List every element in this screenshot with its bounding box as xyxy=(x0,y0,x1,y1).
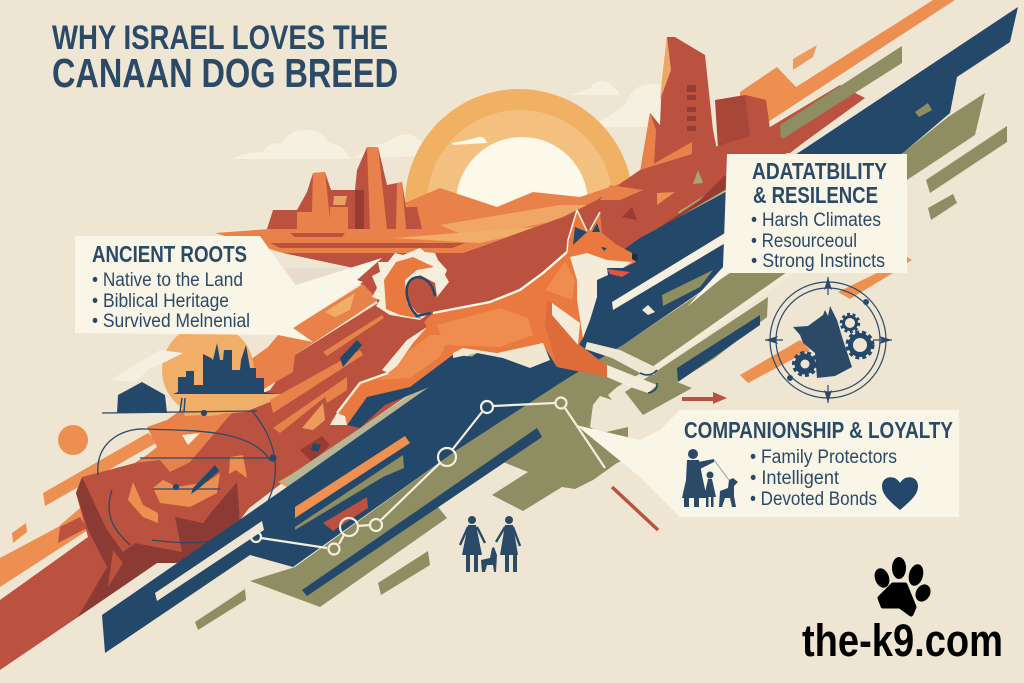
olive stripe top xyxy=(780,46,902,140)
orange stripes near gear icon xyxy=(740,257,912,383)
dog head xyxy=(567,210,638,268)
panel heading: ancient roots: ANCIENT ROOTS xyxy=(92,241,247,267)
dog belly xyxy=(453,343,550,368)
dog xyxy=(330,210,657,428)
dog paw toe lines xyxy=(640,370,657,393)
far foreleg xyxy=(585,342,657,375)
desert mountains and ground xyxy=(215,183,622,253)
panel: companionship and loyalty xyxy=(576,410,959,517)
main red diagonal band xyxy=(0,133,803,670)
dog hind tuft xyxy=(382,327,427,373)
bullet list: ancient roots: • Native to the Land xyxy=(92,270,243,291)
bullet list: companionship: • Intelligent xyxy=(750,468,840,489)
dark slash xyxy=(340,340,362,367)
navy bars on olive xyxy=(302,315,760,596)
olive bands xyxy=(195,93,1007,630)
light sun patch on field xyxy=(325,293,355,317)
icon: dog head with gears in compass xyxy=(765,277,892,403)
dog ears and face xyxy=(567,210,638,277)
red strip detail xyxy=(58,517,87,543)
icon: person, child and dog xyxy=(682,449,738,507)
left orange streaks and circle xyxy=(0,425,158,587)
panel heading: adaptability: & RESILENCE xyxy=(753,182,878,208)
bullet list: ancient roots: • Biblical Heritage xyxy=(92,291,229,312)
pale wedges near skyline xyxy=(110,350,183,382)
thin compass arcs over canyon xyxy=(98,411,276,545)
panel: ancient roots xyxy=(75,236,382,342)
dog body xyxy=(330,252,607,425)
panel heading: adaptability xyxy=(752,158,887,208)
panel heading: adaptability: ADATATBILITY xyxy=(752,158,887,184)
red canyon blob xyxy=(76,430,330,617)
dog tail xyxy=(372,248,449,320)
title: CANAAN DOG BREED xyxy=(52,50,398,96)
sun with rings xyxy=(405,89,633,317)
desert orange patches on right slope xyxy=(600,170,735,240)
panel: adaptability and resilence xyxy=(687,154,907,307)
dog front paw xyxy=(607,365,657,393)
cream stripe on olive xyxy=(655,272,795,370)
bullet list: adaptability: • Resourceoul xyxy=(751,231,857,252)
far right rock towers xyxy=(620,37,772,190)
upper right orange stripe xyxy=(740,0,955,140)
dog shading xyxy=(380,262,575,380)
clouds xyxy=(232,81,660,159)
bullet list: adaptability: • Strong Instincts xyxy=(751,251,885,272)
timeline line xyxy=(102,398,257,416)
dog chest patch xyxy=(552,303,580,345)
bullet list: companionship xyxy=(750,447,897,510)
bullet list: adaptability xyxy=(751,210,885,272)
light khaki stripe xyxy=(280,190,725,488)
red upper right wedge xyxy=(760,85,865,153)
red line and arrow accents xyxy=(612,392,727,530)
icon: tent xyxy=(117,382,167,413)
icon: heart xyxy=(882,477,918,510)
orange streaks in red xyxy=(270,315,384,433)
orange field, left xyxy=(105,284,378,488)
logo paw xyxy=(872,557,934,614)
sun behind skyline xyxy=(162,324,254,416)
dog shadow xyxy=(347,355,480,428)
panel heading: companionship: COMPANIONSHIP & LOYALTY xyxy=(684,417,953,443)
left rock formation xyxy=(267,147,422,229)
icon: skyline xyxy=(173,343,277,394)
line chart xyxy=(251,398,605,554)
title xyxy=(52,19,398,96)
bullet list: companionship: • Family Protectors xyxy=(750,447,897,468)
icon: family with dog xyxy=(460,516,520,572)
dog neck ruff xyxy=(570,253,632,338)
light orange under skyline xyxy=(177,394,290,416)
small orange dash xyxy=(793,45,817,70)
bullet list: companionship: • Devoted Bonds xyxy=(750,489,877,510)
title: WHY ISRAEL LOVES THE xyxy=(52,19,388,57)
bullet list: adaptability: • Harsh Climates xyxy=(751,210,881,231)
bullet list: ancient roots xyxy=(92,270,250,332)
back highlight xyxy=(433,252,567,313)
bullet list: ancient roots: • Survived Melnenial xyxy=(92,311,250,332)
